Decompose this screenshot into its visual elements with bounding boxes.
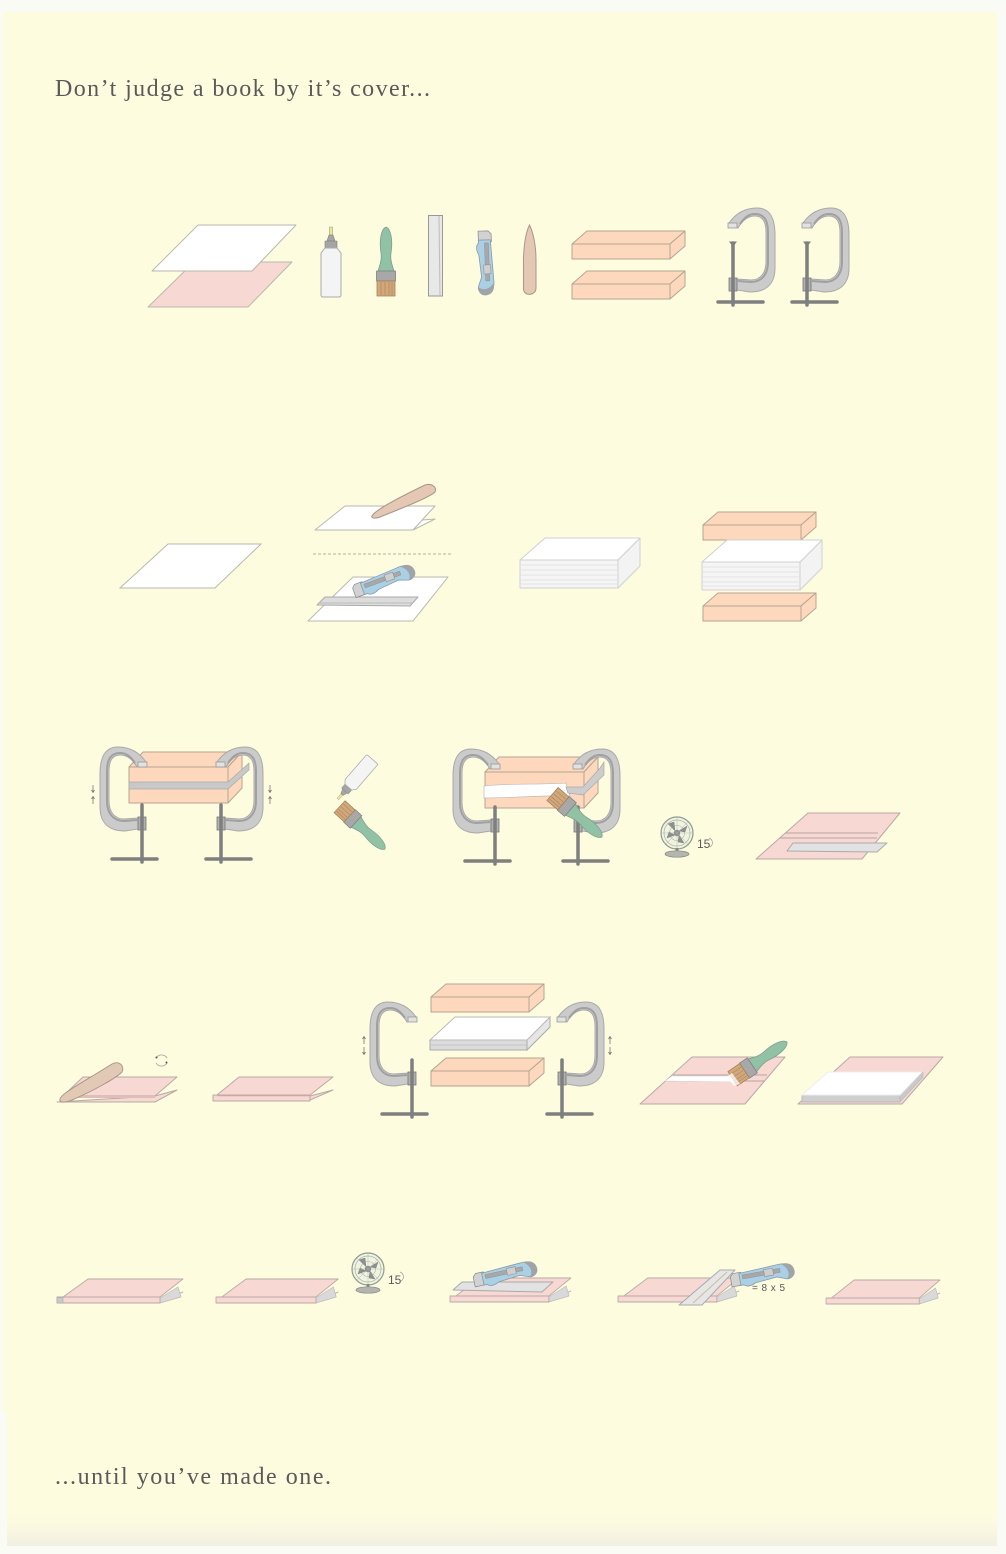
clamps with stack and blocks <box>362 984 612 1117</box>
icon: wood blocks <box>572 231 685 299</box>
pink cover with strips <box>756 813 900 859</box>
folding sheet with bone folder <box>315 484 435 530</box>
row 1: materials and tools <box>148 208 849 307</box>
fan drying 15 minutes: 15 <box>388 1273 402 1287</box>
title: Don’t judge a book by it’s cover... <box>55 76 430 102</box>
fan drying 15 minutes: 15 <box>697 837 711 851</box>
glueing cover with brush <box>640 1035 792 1104</box>
cutting sheet with ruler and knife <box>308 562 448 621</box>
white sheet <box>120 544 261 588</box>
folding cover with bone folder <box>57 1063 177 1102</box>
pressure arrows <box>92 785 272 804</box>
row 3: clamp and glue spine <box>92 747 900 864</box>
glue poured on brush <box>332 754 391 855</box>
fan drying 15 minutes <box>352 1253 403 1293</box>
clamped block <box>100 747 263 862</box>
icon: bone folder <box>523 225 536 294</box>
row 2: cut paper and stack <box>120 484 822 621</box>
book trimming across with ruler <box>618 1262 796 1305</box>
closing text: ...until you’ve made one. <box>55 1464 331 1490</box>
dashed cut divider <box>313 553 452 555</box>
icon: glue bottle <box>321 227 341 297</box>
fan drying 15 minutes <box>661 817 712 857</box>
rotate icon <box>156 1055 168 1066</box>
book trimming with ruler and knife <box>450 1260 571 1302</box>
row 5: finished book steps <box>57 1253 940 1305</box>
book after press <box>216 1279 338 1303</box>
icon: two clamps <box>718 208 849 305</box>
row 4: cover assembly <box>57 984 943 1117</box>
finished book <box>826 1280 940 1304</box>
folded cover <box>213 1077 333 1101</box>
glueing spine in clamp <box>453 749 620 864</box>
icon: craft knife <box>476 231 494 295</box>
icon: ruler <box>428 216 442 296</box>
icon: pink and white sheets <box>148 225 296 307</box>
text block placed on cover <box>798 1057 943 1104</box>
paper stack <box>520 538 640 588</box>
stack between blocks <box>702 512 822 621</box>
all illustration rows <box>57 208 943 1305</box>
icon: brush <box>376 227 396 296</box>
book <box>57 1279 183 1303</box>
book trimming across with ruler: = 8 x 5 <box>752 1283 786 1294</box>
